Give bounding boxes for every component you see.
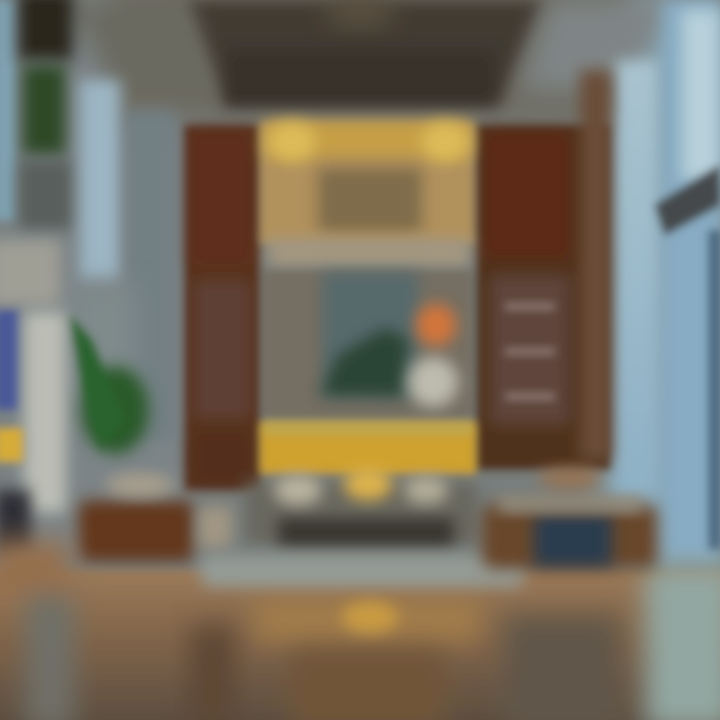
left armchair bbox=[78, 473, 231, 562]
white column bbox=[24, 312, 66, 512]
central sofa bbox=[245, 468, 477, 546]
artwork bbox=[318, 168, 422, 232]
orange accent bbox=[416, 304, 456, 346]
right side: windows and beam bbox=[615, 0, 720, 560]
rug bbox=[200, 555, 525, 587]
right sofa bbox=[482, 467, 658, 569]
yellow headboard band bbox=[260, 422, 476, 474]
plant bbox=[81, 366, 149, 454]
wood panel: right bbox=[476, 70, 612, 470]
white vase bbox=[408, 357, 458, 407]
blue panel bbox=[0, 310, 19, 410]
ceiling bbox=[60, 0, 690, 120]
shelf band bbox=[268, 238, 470, 266]
floor bbox=[0, 540, 720, 720]
left side: windows and plants bbox=[0, 0, 175, 555]
central picture niche bbox=[264, 270, 472, 418]
wood panel: left bbox=[184, 125, 260, 490]
yellow accent bbox=[0, 428, 23, 462]
lit upper alcove bbox=[260, 122, 474, 244]
